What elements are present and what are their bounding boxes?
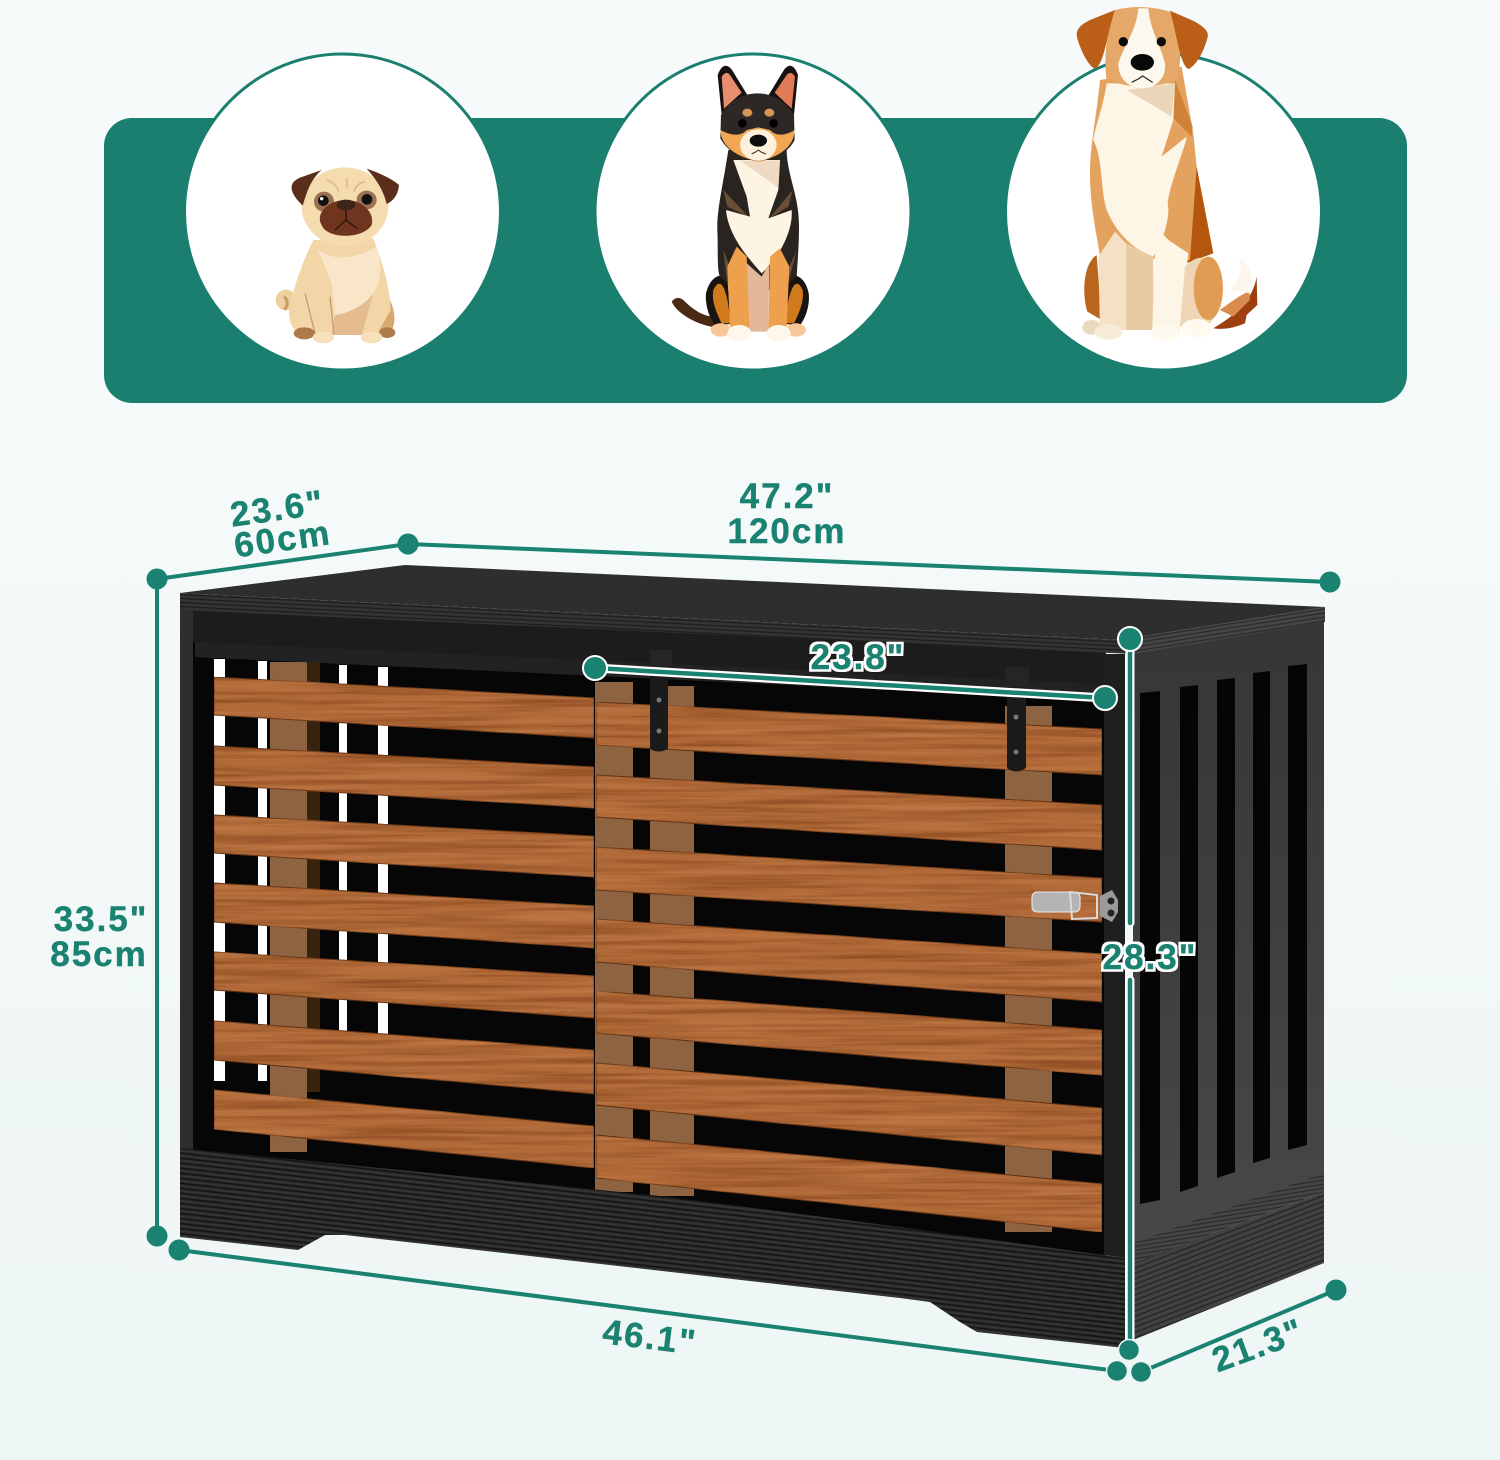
icon: large dog [1077,7,1257,341]
label: height 33.5 in / 85cm: 33.5" [54,900,148,939]
crate side panel [1133,622,1324,1250]
dimension: top width line [408,544,1340,592]
panel: dog size banner [104,118,1407,403]
dimension: bottom depth line [1130,1280,1346,1382]
side slots [1140,664,1307,1204]
sliding rail [195,642,1105,700]
label: depth 23.6 in / 60cm: 23.6" [228,483,327,535]
gaps through back [214,659,388,1081]
label: bottom depth 21.3 in: 21.3" [1207,1311,1309,1380]
label: door width 23.8 in: 23.8" [811,638,905,677]
circle: small dog [184,54,500,370]
label: height 33.5 in / 85cm [50,900,148,974]
label: bottom width 46.1 in: 46.1" [601,1312,699,1363]
icon: pug [276,167,399,343]
left post [180,610,193,1150]
crate top surface [180,565,1325,640]
circle: medium dog [595,54,911,370]
label: width 47.2 in / 120cm: 120cm [728,512,846,551]
upper header [192,610,1106,686]
rear wooden braces [270,662,1052,1232]
crate interior [192,640,1106,1262]
label: width 47.2 in / 120cm: 47.2" [740,477,834,516]
front plinth with notched feet [180,1148,1125,1348]
right post [1104,654,1125,1258]
label: inner height 28.3 in: 28.3" [1103,938,1197,977]
rear brace shadows [307,662,320,1092]
label: width 47.2 in / 120cm [728,477,846,551]
side top edge [1120,607,1325,654]
top front edge [180,593,1133,654]
side plinth upper strip [1133,1173,1324,1263]
icon: shepherd dog [672,66,809,342]
dimension: inner height line [1118,627,1142,1360]
label: depth 23.6 in / 60cm [227,483,334,565]
right door slats [596,702,1102,1232]
label: depth 23.6 in / 60cm: 60cm [232,513,334,565]
circle: large dog [1006,54,1322,370]
door hanger strap left [650,650,672,752]
left door slats [214,677,594,1168]
side plinth [1133,1192,1324,1340]
dimension: overall height line [146,579,168,1246]
dimension: back depth line [146,534,418,590]
label: height 33.5 in / 85cm: 85cm [50,935,148,974]
door hanger strap right [1005,667,1029,772]
furniture: dog crate [180,565,1325,1348]
latch [1032,890,1118,922]
dimension: door width line [583,656,1117,710]
dimension: bottom width line [168,1240,1128,1382]
